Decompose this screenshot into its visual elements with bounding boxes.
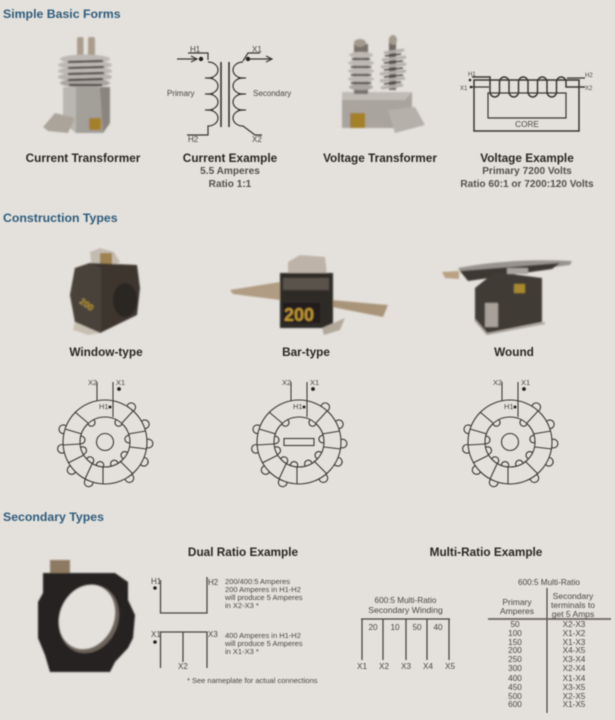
heading: Dual Ratio Example: Dual Ratio Example bbox=[188, 545, 299, 559]
table: 600:5 multi-ratio: X1-X4 bbox=[563, 674, 586, 683]
text: 200 ampere note: in X2-X3 * bbox=[225, 601, 259, 610]
text: 200 ampere note: 200/400:5 Amperes bbox=[225, 577, 290, 586]
table: 600:5 multi-ratio: 450 bbox=[508, 683, 522, 692]
table: 600:5 multi-ratio: X2-X4 bbox=[563, 664, 586, 673]
diagram: wound winding bbox=[462, 378, 558, 488]
caption: Current Example: Current Example bbox=[183, 151, 278, 165]
table: 600:5 multi-ratio: 600 bbox=[508, 700, 522, 709]
caption: Current Example: 5.5 Amperes bbox=[200, 166, 260, 177]
table: 600:5 multi-ratio: 600:5 Multi-Ratio bbox=[518, 578, 580, 587]
table: 600:5 multi-ratio: 500 bbox=[508, 692, 522, 701]
table: 600:5 multi-ratio: X4-X5 bbox=[563, 646, 586, 655]
caption: Current Example: Ratio 1:1 bbox=[209, 179, 252, 190]
diagram: multi-ratio secondary winding: Secondary Winding bbox=[368, 605, 443, 615]
diagram: multi-ratio secondary winding: 10 bbox=[390, 623, 400, 632]
label: Wound: Wound bbox=[494, 345, 534, 359]
diagram: dual ratio windings: H2 bbox=[208, 578, 219, 587]
label: Window-type: Window-type bbox=[69, 345, 143, 359]
diagram: current example: H1 bbox=[190, 45, 201, 54]
diagram: bar-type winding: X1 bbox=[310, 378, 319, 387]
diagram: current example: Primary bbox=[167, 89, 195, 98]
footnote: * See nameplate for actual connections bbox=[187, 676, 318, 685]
diagram: window-type winding: H1 bbox=[99, 402, 109, 411]
diagram: multi-ratio secondary winding: X3 bbox=[401, 662, 411, 671]
diagram: multi-ratio secondary winding: X1 bbox=[357, 662, 367, 671]
diagram: current example: H2 bbox=[188, 135, 199, 144]
table: 600:5 multi-ratio: 400 bbox=[508, 674, 522, 683]
table: 600:5 multi-ratio: X1-X3 bbox=[563, 638, 586, 647]
diagram: multi-ratio secondary winding: 40 bbox=[433, 623, 443, 632]
diagram: dual ratio windings: X2 bbox=[178, 662, 188, 671]
diagram: voltage example core: X2 bbox=[585, 86, 593, 92]
photo: window-type: 200 bbox=[78, 296, 96, 313]
diagram: window-type winding: X1 bbox=[116, 378, 125, 387]
diagram: bar-type winding: H1 bbox=[293, 402, 303, 411]
diagram: multi-ratio secondary winding bbox=[357, 596, 455, 671]
diagram: current example bbox=[167, 45, 291, 144]
text: 200 ampere note: 200 Amperes in H1-H2 bbox=[225, 585, 301, 594]
table: 600:5 multi-ratio: X2-X3 bbox=[563, 620, 586, 629]
diagram: dual ratio windings: X3 bbox=[208, 630, 218, 639]
diagram: current example: Secondary bbox=[253, 89, 291, 98]
heading: Construction Types: Construction Types bbox=[3, 211, 118, 225]
diagram: multi-ratio secondary winding: 20 bbox=[368, 623, 378, 632]
diagram: multi-ratio secondary winding: X5 bbox=[445, 662, 455, 671]
diagram: window-type winding: X2 bbox=[88, 378, 97, 387]
photo: bar-type: 200 bbox=[284, 305, 314, 325]
photo: window-type bbox=[70, 248, 140, 335]
diagram: dual ratio windings bbox=[151, 577, 219, 671]
text: 400 ampere note bbox=[224, 631, 303, 656]
photo: voltage transformer bbox=[342, 35, 425, 133]
diagram: bar-type winding: X2 bbox=[282, 378, 291, 387]
table: 600:5 multi-ratio: X2-X5 bbox=[563, 692, 586, 701]
text: 400 ampere note: 400 Amperes in H1-H2 bbox=[225, 631, 301, 640]
table: 600:5 multi-ratio: X1-X2 bbox=[563, 629, 586, 638]
table: 600:5 multi-ratio: X1-X5 bbox=[563, 700, 586, 709]
diagram: window-type winding bbox=[57, 378, 153, 488]
diagram: voltage example core: X1 bbox=[460, 86, 468, 92]
photo: bar-type bbox=[230, 255, 388, 335]
diagram: multi-ratio secondary winding: 50 bbox=[412, 623, 422, 632]
table: 600:5 multi-ratio: 300 bbox=[508, 664, 522, 673]
table: 600:5 multi-ratio: Amperes bbox=[500, 606, 534, 616]
diagram: voltage example core: CORE bbox=[515, 120, 539, 129]
table: 600:5 multi-ratio: 250 bbox=[508, 655, 522, 664]
diagram: wound winding: X1 bbox=[521, 378, 530, 387]
table: 600:5 multi-ratio: 150 bbox=[508, 638, 522, 647]
photo: ring current transformer bbox=[38, 560, 135, 672]
table: 600:5 multi-ratio: Primary bbox=[502, 597, 532, 607]
diagram: multi-ratio secondary winding: X4 bbox=[423, 662, 433, 671]
caption: Voltage Example: Voltage Example bbox=[480, 151, 574, 165]
text: 400 ampere note: in X1-X3 * bbox=[225, 647, 259, 656]
text: 200 ampere note bbox=[224, 577, 303, 610]
diagram: dual ratio windings: H1 bbox=[151, 577, 162, 586]
text: 200 ampere note: will produce 5 Amperes bbox=[224, 593, 303, 602]
table: 600:5 multi-ratio: terminals to bbox=[551, 600, 595, 610]
table: 600:5 multi-ratio: X3-X5 bbox=[563, 683, 586, 692]
table: 600:5 multi-ratio: 100 bbox=[508, 629, 522, 638]
label: Current Transformer: Current Transformer bbox=[26, 151, 141, 165]
table: 600:5 multi-ratio: X3-X4 bbox=[563, 655, 586, 664]
diagram: multi-ratio secondary winding: 600:5 Multi-Ratio bbox=[375, 596, 437, 605]
caption: Voltage Example: Ratio 60:1 or 7200:120 Volts bbox=[460, 179, 594, 190]
diagram: wound winding: H1 bbox=[504, 402, 514, 411]
diagram: current example: X2 bbox=[252, 135, 262, 144]
label: Bar-type: Bar-type bbox=[282, 345, 330, 359]
diagram: bar-type winding bbox=[251, 378, 347, 488]
diagram: dual ratio windings: X1 bbox=[151, 630, 161, 639]
text: 400 ampere note: will produce 5 Amperes bbox=[224, 639, 303, 648]
photo: wound bbox=[442, 260, 572, 334]
table: 600:5 multi-ratio: get 5 Amps bbox=[552, 609, 594, 619]
diagram: multi-ratio secondary winding: X2 bbox=[379, 662, 389, 671]
diagram: voltage example core: H1 bbox=[468, 72, 476, 78]
heading: Multi-Ratio Example: Multi-Ratio Example bbox=[430, 545, 543, 559]
label: Voltage Transformer: Voltage Transformer bbox=[323, 151, 437, 165]
table: 600:5 multi-ratio: Secondary bbox=[553, 591, 594, 601]
diagram: wound winding: X2 bbox=[493, 378, 502, 387]
caption: Voltage Example bbox=[460, 151, 594, 190]
photo: current transformer bbox=[43, 37, 112, 133]
diagram: current example: X1 bbox=[252, 45, 262, 54]
caption: Voltage Example: Primary 7200 Volts bbox=[482, 166, 572, 177]
table: 600:5 multi-ratio: 50 bbox=[510, 620, 520, 629]
table: 600:5 multi-ratio bbox=[488, 578, 611, 713]
caption: Current Example bbox=[183, 151, 278, 190]
table: 600:5 multi-ratio: 200 bbox=[508, 646, 522, 655]
diagram: voltage example core: H2 bbox=[585, 73, 593, 79]
diagram: voltage example core bbox=[460, 72, 593, 131]
heading: Secondary Types: Secondary Types bbox=[3, 510, 104, 524]
heading: Simple Basic Forms: Simple Basic Forms bbox=[3, 7, 121, 21]
